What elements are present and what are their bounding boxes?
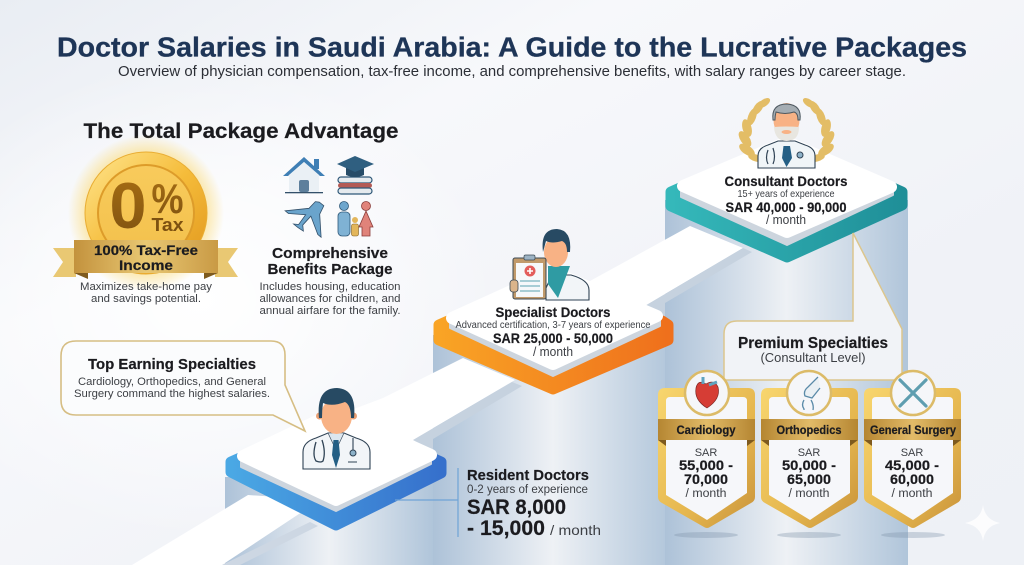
icon: gold coin: % — [152, 175, 184, 222]
text: resident salary: SAR 8,000 — [467, 496, 566, 519]
icon: resident doctor — [303, 388, 370, 469]
icon: specialist doctor — [510, 229, 589, 300]
text: specialist doctors: SAR 25,000 - 50,000 — [493, 331, 613, 346]
icon: crossed scalpels — [900, 380, 926, 406]
platform: specialist — [439, 272, 668, 389]
icon: sparkle watermark — [965, 505, 1000, 541]
card: cardiology: 55,000 - — [679, 458, 733, 473]
platform: consultant — [671, 142, 902, 257]
heading: comprehensive benefits package: Comprehensive — [272, 245, 388, 262]
text: consultant doctors: / month — [766, 213, 806, 227]
subtitle: Overview of physician compensation, tax-free income, and comprehensive benefits, with salary ranges by career stage. — [118, 64, 906, 80]
icon: gold coin: Tax — [152, 215, 184, 235]
card: cardiology — [658, 371, 755, 528]
card: general surgery: 60,000 — [890, 472, 934, 487]
icon: gold coin — [68, 135, 224, 291]
card: general surgery: SAR — [901, 447, 923, 459]
text: consultant doctors — [724, 173, 848, 227]
heading: total package advantage: The Total Package Advantage — [84, 120, 398, 143]
card: general surgery: / month — [892, 488, 932, 500]
card: cardiology: / month — [686, 488, 726, 500]
text: benefits description — [260, 281, 400, 317]
title: Doctor Salaries in Saudi Arabia: A Guide to the Lucrative Packages — [57, 32, 967, 62]
icon: graduation cap and books — [337, 156, 374, 194]
platform: resident — [231, 412, 441, 525]
panel: total package advantage — [53, 120, 400, 317]
card: orthopedics: 65,000 — [787, 472, 831, 487]
heading: resident doctors: Resident Doctors — [467, 467, 589, 484]
text: resident experience: 0-2 years of experience — [467, 484, 588, 496]
column: resident — [225, 477, 433, 565]
icon: knee joint — [802, 377, 820, 410]
ribbon: tax-free income: Income — [119, 257, 173, 273]
card: cardiology: 70,000 — [684, 472, 728, 487]
leader line — [395, 468, 458, 537]
card: cardiology: SAR — [695, 447, 717, 459]
card: orthopedics: 50,000 - — [782, 458, 836, 473]
white staircase ribbon — [132, 226, 752, 565]
callout: top earning specialties: Cardiology, Orthopedics, and General — [78, 376, 266, 388]
text: specialist doctors: Specialist Doctors — [496, 304, 611, 320]
card: orthopedics: Orthopedics — [776, 423, 842, 437]
card: general surgery: General Surgery — [870, 423, 956, 437]
card shadows — [674, 532, 945, 538]
resident info — [395, 467, 601, 540]
heading: premium specialties: (Consultant Level) — [760, 350, 866, 365]
callout: top earning specialties: Surgery command the highest salaries. — [74, 388, 270, 400]
text: consultant doctors: Consultant Doctors — [724, 173, 848, 189]
callout: top earning specialties — [61, 341, 305, 431]
column: consultant — [665, 200, 908, 565]
icon: house — [283, 157, 325, 193]
card: orthopedics: / month — [788, 488, 830, 500]
text: maximizes take-home pay: Maximizes take-home pay — [80, 281, 213, 293]
heading: premium specialties — [738, 335, 888, 365]
ribbon: tax-free income: 100% Tax-Free — [94, 242, 198, 258]
text: specialist doctors: / month — [533, 345, 573, 359]
heading: premium specialties: Premium Specialties — [738, 335, 888, 352]
text: benefits description: allowances for children, and — [260, 293, 400, 305]
heading: comprehensive benefits package: Benefits Package — [268, 261, 392, 278]
card: cardiology: Cardiology — [676, 423, 736, 437]
card: orthopedics: SAR — [798, 447, 820, 459]
text: resident salary — [467, 496, 601, 540]
column: specialist — [433, 335, 673, 565]
icon: airplane — [285, 201, 327, 241]
callout frame — [724, 233, 902, 380]
icon: heart — [696, 377, 719, 408]
text: maximizes take-home pay — [80, 281, 213, 305]
text: benefits description: Includes housing, education — [260, 281, 400, 293]
text: specialist doctors — [456, 304, 651, 359]
card: orthopedics — [761, 371, 858, 528]
text: benefits description: annual airfare for the family. — [260, 305, 400, 317]
text: maximizes take-home pay: and savings potential. — [91, 293, 201, 305]
callout: top earning specialties: Top Earning Specialties — [88, 356, 256, 373]
text: consultant doctors: SAR 40,000 - 90,000 — [726, 200, 846, 215]
icon: consultant doctor with laurel — [736, 96, 837, 168]
text: resident salary: / month — [550, 522, 601, 538]
card: general surgery: 45,000 - — [885, 458, 939, 473]
icon: gold coin: 0 — [110, 169, 146, 242]
text: consultant doctors: 15+ years of experience — [738, 188, 835, 200]
ribbon: tax-free income — [53, 240, 238, 279]
text: specialist doctors: Advanced certification, 3-7 years of experience — [456, 320, 651, 331]
card: general surgery — [864, 371, 961, 528]
heading: comprehensive benefits package — [268, 245, 392, 278]
panel: premium specialties — [658, 233, 961, 538]
icon: family — [338, 202, 373, 236]
text: resident salary: - 15,000 — [467, 517, 545, 540]
